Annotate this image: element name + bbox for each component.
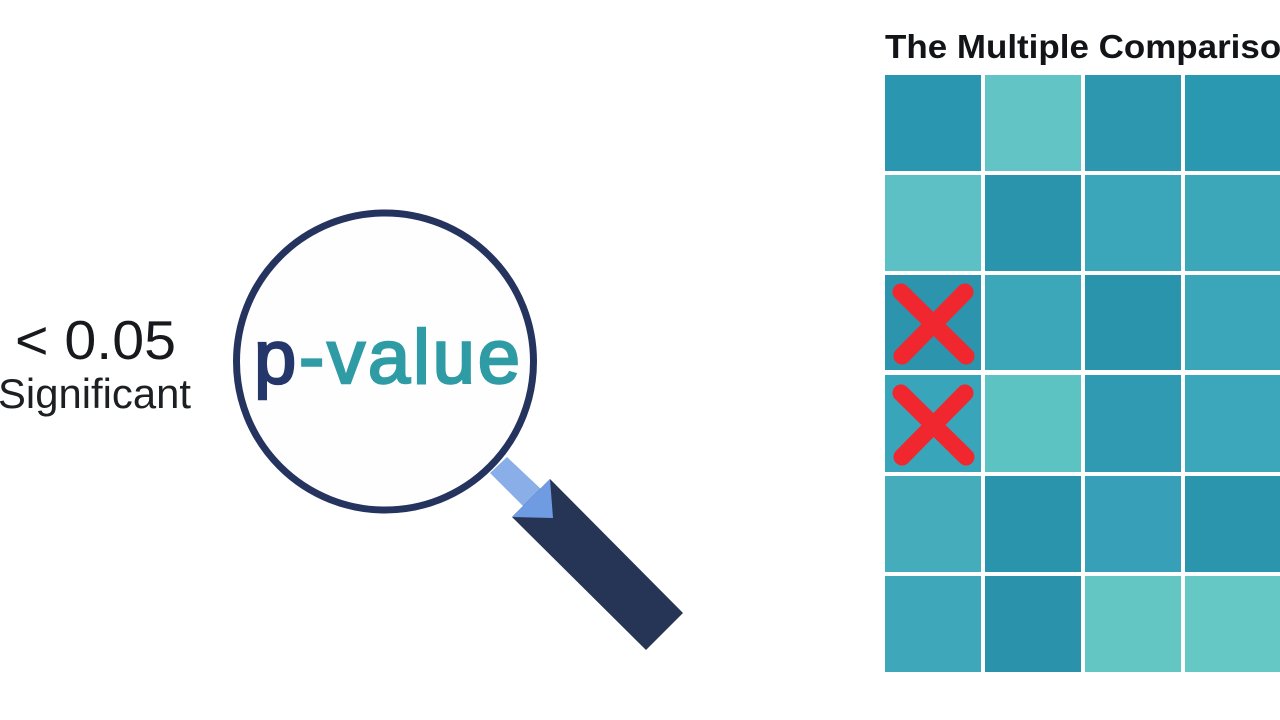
threshold value: < 0.05 — [15, 309, 176, 371]
icon: red cross, row 3 — [901, 292, 966, 356]
handle arrow facet — [512, 479, 553, 518]
grid of comparison tests — [885, 75, 1280, 672]
magnifier neck — [490, 457, 542, 507]
lens label: p-value: p-value — [254, 315, 520, 400]
magnifier lens — [236, 213, 534, 510]
significance label: Significant — [0, 370, 191, 417]
icon: red cross, row 4 — [901, 393, 966, 457]
magnifier handle — [512, 479, 683, 650]
icon: magnifying glass with p-value — [236, 213, 683, 650]
threshold label: less than 0.05 significant — [0, 309, 191, 417]
